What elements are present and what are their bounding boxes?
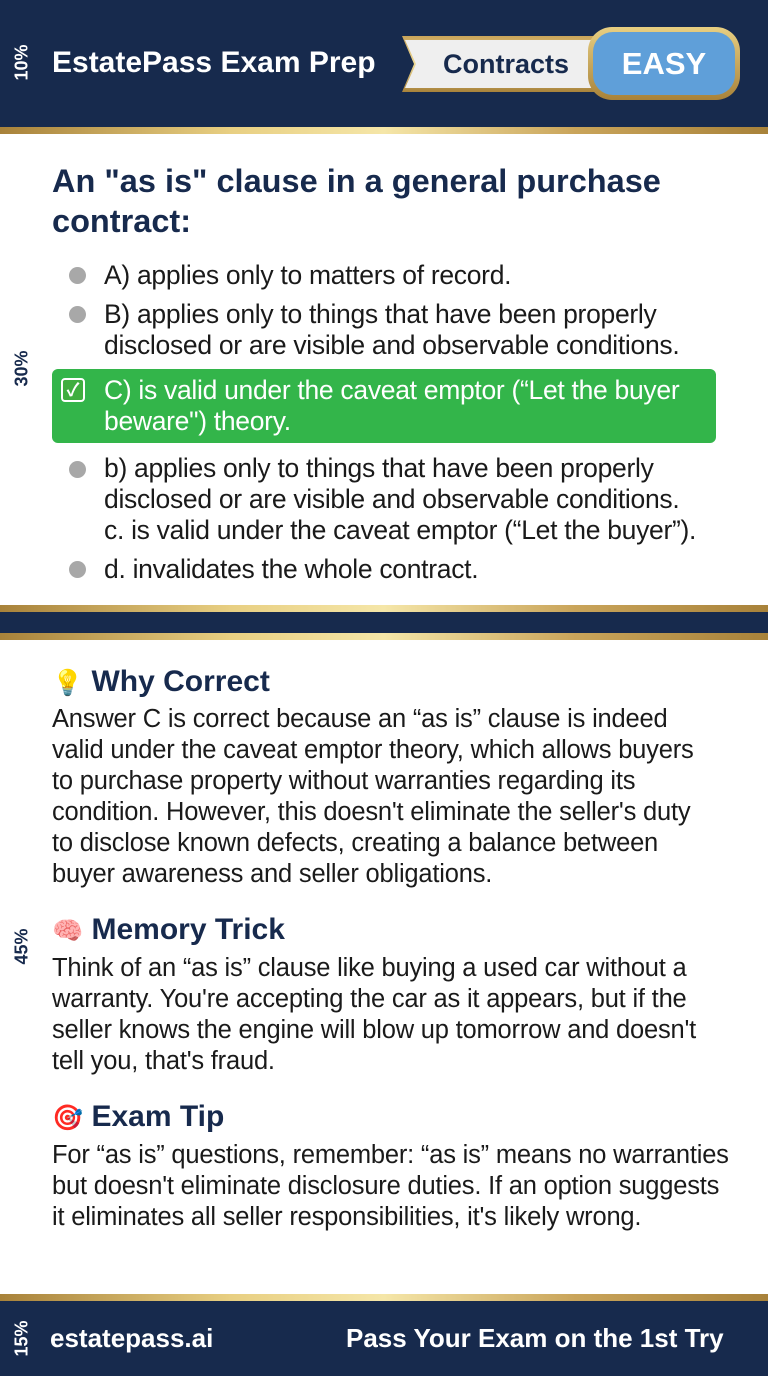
correct answer highlight: ✓	[66, 380, 80, 400]
section: Exam Tip: it eliminates all seller responsibilities, it's likely wrong.	[52, 1203, 641, 1231]
section: Memory Trick: seller knows the engine will blow up tomorrow and doesn't	[52, 1016, 696, 1044]
section: Why Correct: 💡 Why Correct	[52, 665, 270, 698]
category ribbon: Contracts: Contracts	[443, 49, 569, 79]
answer options	[52, 260, 716, 584]
answer options: A) applies only to matters of record.	[104, 260, 511, 290]
footer percent label: 15%	[12, 1320, 32, 1357]
section: Why Correct: valid under the caveat emptor theory, which allows buyers	[52, 736, 694, 764]
footer site name: estatepass.ai	[50, 1323, 213, 1353]
answer options: B) applies only to things that have been properly	[104, 299, 656, 329]
answer options: disclosed or are visible and observable conditions.	[104, 330, 679, 360]
answer options: d. invalidates the whole contract.	[104, 554, 478, 584]
section: Exam Tip: but doesn't eliminate disclosure duties. If an option suggests	[52, 1172, 719, 1200]
section: Why Correct	[52, 665, 694, 888]
answer options: c. is valid under the caveat emptor (“Let the buyer”).	[104, 515, 696, 545]
section: Memory Trick	[52, 913, 696, 1075]
header bar	[0, 0, 768, 127]
correct answer highlight: beware") theory.	[104, 406, 291, 436]
correct answer highlight	[52, 369, 716, 443]
answer options: b) applies only to things that have been properly	[104, 453, 654, 483]
explanation percent label: 45%	[12, 928, 32, 965]
section: Why Correct: condition. However, this doesn't eliminate the seller's duty	[52, 798, 690, 826]
question title: An "as is" clause in a general purchase	[52, 163, 661, 199]
divider band	[0, 605, 768, 640]
footer bar	[0, 1301, 768, 1376]
question title	[52, 163, 661, 239]
section: Why Correct: to purchase property without warranties regarding its	[52, 767, 635, 795]
section: Exam Tip: For “as is” questions, remember: “as is” means no warranties	[52, 1141, 729, 1169]
question percent label: 30%	[12, 350, 32, 387]
answer options: disclosed or are visible and observable conditions.	[104, 484, 679, 514]
section: Why Correct: Answer C is correct because an “as is” clause is indeed	[52, 705, 667, 733]
correct answer highlight: C) is valid under the caveat emptor (“Let the buyer	[104, 375, 679, 405]
section: Why Correct: buyer awareness and seller obligations.	[52, 860, 492, 888]
section: Memory Trick: warranty. You're accepting the car as it appears, but if the	[52, 985, 687, 1013]
section: Exam Tip: 🎯 Exam Tip	[52, 1100, 224, 1133]
section: Memory Trick: tell you, that's fraud.	[52, 1047, 275, 1075]
difficulty badge: EASY: EASY	[622, 46, 706, 81]
header title: EstatePass Exam Prep	[52, 46, 376, 79]
difficulty badge: EASY	[588, 27, 740, 100]
section: Exam Tip	[52, 1100, 729, 1231]
header percent label: 10%	[12, 44, 32, 81]
section: Memory Trick: Think of an “as is” clause like buying a used car without a	[52, 954, 687, 982]
section: Memory Trick: 🧠 Memory Trick	[52, 913, 285, 946]
question title: contract:	[52, 203, 191, 239]
footer slogan: Pass Your Exam on the 1st Try	[346, 1323, 724, 1353]
category ribbon: Contracts	[402, 36, 602, 92]
section: Why Correct: to disclose known defects, creating a balance between	[52, 829, 658, 857]
